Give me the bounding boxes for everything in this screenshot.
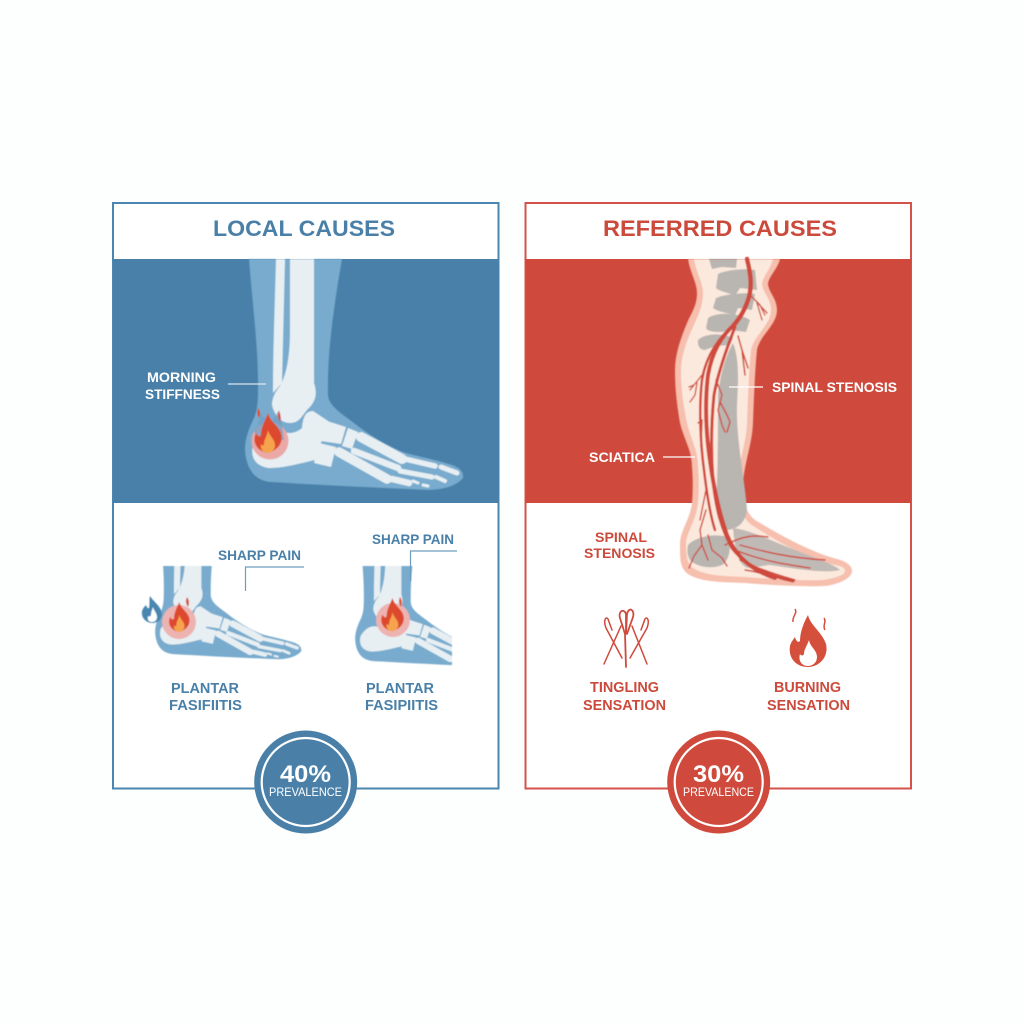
label: plantar fasiitis right [365, 681, 438, 714]
label: plantar fasiitis right: FASIPIITIS [365, 698, 438, 714]
label: burning sensation [767, 680, 850, 714]
leg outline [675, 259, 852, 586]
label: spinal stenosis white: SPINAL STENOSIS [772, 379, 897, 395]
blue illustration band [113, 259, 498, 503]
label: tingling sensation: SENSATION [583, 698, 666, 714]
icon: burning flame [790, 609, 827, 667]
heading: local causes: LOCAL CAUSES [213, 216, 395, 241]
label: spinal stenosis red: SPINAL [595, 529, 647, 545]
badge: 30% prevalence [667, 730, 770, 834]
label: plantar fasiitis left: FASIFIITIS [169, 698, 242, 714]
panel: referred causes [526, 203, 911, 834]
illustration: small foot left [154, 565, 302, 660]
label: plantar fasiitis left [169, 681, 242, 714]
label: burning sensation: SENSATION [767, 698, 850, 714]
label: spinal stenosis red: STENOSIS [584, 545, 655, 561]
label: sharp pain right [372, 531, 457, 581]
vertebrae [698, 259, 757, 350]
label: sciatica [589, 449, 695, 465]
label: morning stiffness: MORNING [147, 369, 216, 385]
badge: 40% prevalence: 40% [280, 761, 331, 788]
icon: blue flame [142, 596, 162, 623]
label: sharp pain left [218, 547, 304, 591]
label: morning stiffness [145, 369, 266, 402]
red illustration band [526, 259, 911, 503]
tibia and foot bones [687, 343, 840, 571]
icon: needles [604, 610, 648, 667]
nerves [689, 259, 825, 581]
label: plantar fasiitis left: PLANTAR [171, 681, 240, 697]
label: spinal stenosis red [584, 529, 655, 561]
label: tingling sensation: TINGLING [590, 680, 659, 696]
label: morning stiffness: STIFFNESS [145, 386, 220, 402]
illustration: leg with nerves [675, 259, 852, 586]
badge: 30% prevalence: 30% [693, 761, 744, 788]
label: sharp pain left: SHARP PAIN [218, 547, 301, 563]
panel: local causes [113, 203, 501, 834]
label: plantar fasiitis right: PLANTAR [366, 681, 435, 697]
label: sciatica: SCIATICA [589, 449, 655, 465]
label: tingling sensation [583, 680, 666, 714]
label: sharp pain right: SHARP PAIN [372, 531, 454, 547]
badge: 30% prevalence: PREVALENCE [683, 785, 754, 799]
badge: 40% prevalence: PREVALENCE [269, 785, 342, 799]
label: burning sensation: BURNING [774, 680, 841, 696]
illustration: small foot right [354, 565, 453, 666]
illustration: foot skeleton with heel flame [245, 259, 463, 490]
leg inner tissue [681, 259, 845, 580]
badge: 40% prevalence [254, 730, 357, 834]
heading: referred causes: REFERRED CAUSES [603, 216, 837, 241]
